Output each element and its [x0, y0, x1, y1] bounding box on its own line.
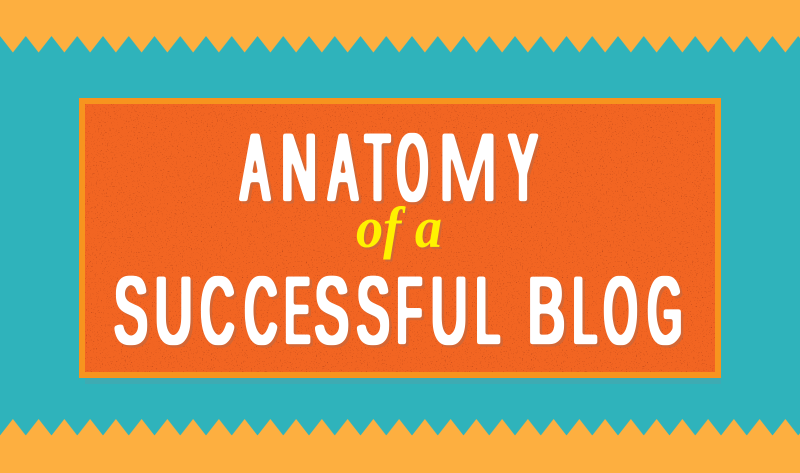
title line: ANATOMY: T [365, 115, 390, 221]
title line: SUCCESSFUL BLOG: C [245, 257, 277, 363]
title line: SUCCESSFUL BLOG: U [155, 259, 192, 364]
title line: SUCCESSFUL BLOG: U [431, 258, 467, 364]
title line: ANATOMY: A [329, 115, 357, 221]
title line: SUCCESSFUL BLOG: L [476, 258, 500, 364]
bottom zigzag band [0, 419, 800, 473]
title line: SUCCESSFUL BLOG: S [114, 259, 147, 364]
title line: ANATOMY: O [397, 115, 428, 221]
title line: SUCCESSFUL BLOG: L [573, 258, 597, 364]
title line: SUCCESSFUL BLOG: S [357, 257, 389, 363]
title line: ANATOMY: M [438, 115, 498, 220]
title line: SUCCESSFUL BLOG [114, 257, 682, 364]
title line: SUCCESSFUL BLOG: C [201, 258, 234, 363]
title line: SUCCESSFUL BLOG: F [397, 259, 422, 364]
title panel [79, 98, 721, 384]
title line: ANATOMY: Y [509, 115, 537, 221]
title line: SUCCESSFUL BLOG: O [604, 258, 637, 364]
script line: of a: of a [356, 195, 442, 260]
title line: ANATOMY: A [241, 115, 269, 221]
top zigzag band [0, 0, 800, 52]
title line: SUCCESSFUL BLOG: G [648, 257, 682, 364]
title line: SUCCESSFUL BLOG: E [285, 259, 310, 364]
title line: SUCCESSFUL BLOG: S [315, 258, 348, 364]
title line: SUCCESSFUL BLOG: B [528, 259, 565, 364]
title line: ANATOMY: N [281, 115, 317, 220]
title line: ANATOMY [241, 115, 537, 221]
